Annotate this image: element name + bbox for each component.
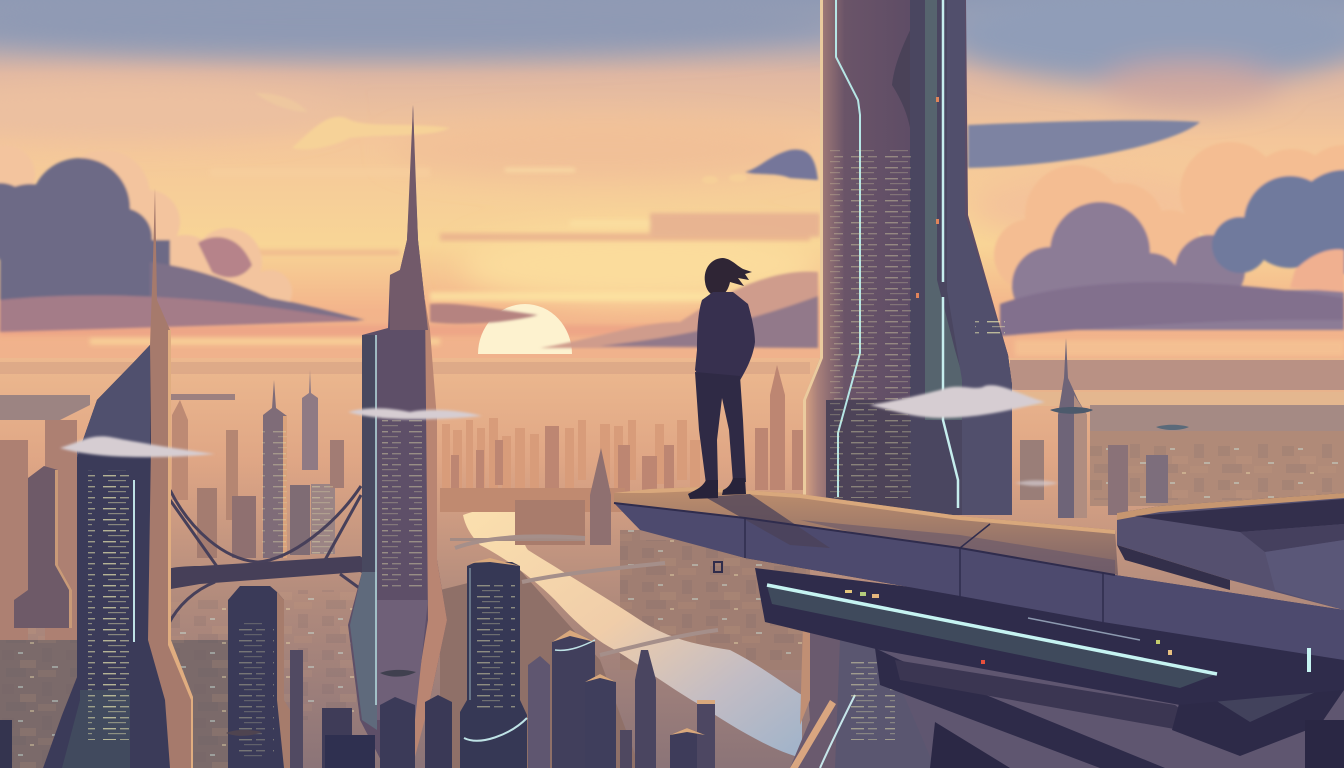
figure: boots <box>688 478 746 499</box>
sky background <box>0 0 1344 370</box>
distant land and water bands <box>0 360 1344 768</box>
bridges over river <box>455 536 718 655</box>
towers behind platform on right <box>1020 338 1168 518</box>
figure standing on ledge <box>688 258 755 499</box>
sun <box>478 304 572 354</box>
mid-distance towers left <box>0 370 344 640</box>
figure: legs <box>695 372 746 484</box>
cloud: left cumulus <box>0 145 365 332</box>
platform: underside supports <box>875 648 1344 768</box>
distant city skyline centre <box>440 365 810 545</box>
flying vehicles <box>226 407 1189 736</box>
cloud: right cumulus <box>968 120 1344 336</box>
figure: torso and arms <box>695 292 755 391</box>
wisp clouds around towers <box>60 385 1058 486</box>
background behind platform underside <box>880 640 1344 768</box>
bridge linking left towers <box>150 486 377 625</box>
foreground dark towers at bottom centre <box>0 558 715 768</box>
river <box>463 509 802 758</box>
figure: hair <box>705 258 752 296</box>
city texture <box>0 440 1344 768</box>
cloud: low clouds behind figure <box>430 272 818 348</box>
ground plain of distant city <box>0 358 1344 768</box>
lower part of giant tower under platform <box>790 625 935 768</box>
platform: main slab <box>614 487 1344 705</box>
tower: left foreground <box>43 188 193 768</box>
tower: giant right tower <box>803 0 1012 515</box>
sky colour washes <box>0 0 1344 305</box>
cloud: small upper centre wisps <box>255 93 818 184</box>
thin horizontal sunset streaks <box>0 168 1344 356</box>
tower: left centre tall spire <box>348 105 447 768</box>
